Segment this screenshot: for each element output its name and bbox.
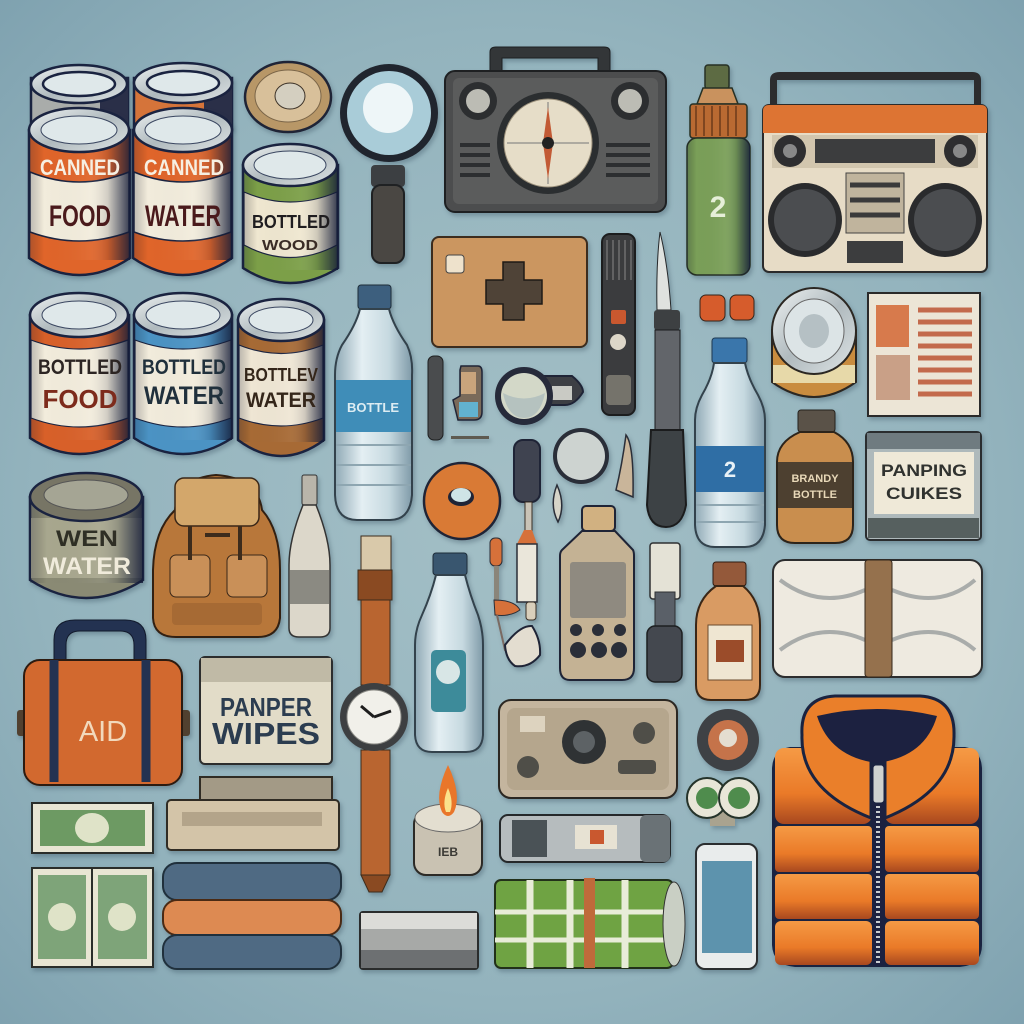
can: bottlev water: BOTTLEV bbox=[244, 365, 318, 385]
water bottle large: BOTTLE bbox=[347, 400, 399, 415]
compass radio case bbox=[445, 47, 666, 212]
shard bbox=[616, 435, 633, 497]
can: bottled food bbox=[30, 293, 129, 454]
camera bbox=[499, 700, 677, 798]
can: wen water: WATER bbox=[43, 553, 131, 580]
lid disc bbox=[245, 62, 331, 132]
amber jar bbox=[777, 410, 853, 543]
magnifying glass bbox=[340, 64, 438, 263]
box: panping cuikes: CUIKES bbox=[886, 484, 962, 503]
water bottle tall bbox=[415, 553, 483, 752]
first aid pad bbox=[432, 237, 587, 347]
wipes pack: WIPES bbox=[212, 716, 320, 751]
bag: aid bbox=[17, 620, 190, 785]
small clip tool bbox=[453, 366, 482, 420]
small amber bottle bbox=[696, 562, 760, 700]
orange capsules bbox=[700, 295, 754, 321]
vest zip pull bbox=[873, 765, 884, 803]
can: bottled wood: BOTTLED bbox=[252, 212, 330, 232]
can: canned food: CANNED bbox=[40, 155, 120, 180]
water bottle right: 2 bbox=[724, 457, 736, 482]
vest quilted rows bbox=[775, 826, 979, 965]
puffer vest bbox=[772, 696, 982, 967]
vest shoulder panels bbox=[775, 748, 979, 824]
can: bottled wood: WOOD bbox=[262, 237, 318, 254]
orange tape disc bbox=[424, 463, 500, 539]
scissor tool bbox=[490, 538, 540, 666]
newspaper bbox=[868, 293, 980, 416]
green rolled mat bbox=[495, 878, 685, 968]
can: bottled water: BOTTLED bbox=[142, 356, 226, 379]
phone bbox=[696, 844, 757, 969]
can: canned water: CANNED bbox=[144, 155, 224, 180]
torch horizontal bbox=[500, 815, 670, 862]
banknote small bbox=[32, 803, 153, 853]
can: bottled water bbox=[134, 293, 232, 454]
open can bbox=[772, 288, 856, 397]
wipes pack: PANPER bbox=[220, 692, 312, 722]
boombox bbox=[763, 72, 987, 272]
can: canned food bbox=[29, 108, 130, 275]
can: bottlev water bbox=[238, 299, 324, 456]
vest collar opening bbox=[817, 709, 937, 763]
can: canned food: FOOD bbox=[49, 200, 111, 233]
walkie talkie bbox=[560, 506, 634, 680]
screwdriver knife bbox=[647, 232, 686, 527]
folded towels bbox=[163, 863, 341, 969]
small lens bbox=[495, 367, 583, 425]
slim bottle bbox=[289, 475, 330, 637]
badge bbox=[697, 709, 759, 771]
can: bottled food: BOTTLED bbox=[38, 356, 122, 379]
green bottle: 2 bbox=[710, 191, 726, 224]
pen bbox=[428, 356, 489, 440]
drop bbox=[553, 485, 562, 522]
can: bottlev water: WATER bbox=[246, 389, 316, 412]
banknotes pair bbox=[32, 868, 153, 967]
green bottle bbox=[687, 65, 750, 275]
wrist watch bbox=[340, 536, 408, 892]
candle bbox=[414, 765, 482, 875]
vest zipper bbox=[872, 765, 885, 965]
can: wen water bbox=[30, 473, 143, 598]
amber jar: BRANDY bbox=[791, 473, 839, 485]
bag: aid: AID bbox=[79, 716, 127, 748]
can: back right bbox=[134, 63, 232, 128]
can: bottled water: WATER bbox=[144, 382, 224, 410]
can: bottled wood bbox=[243, 144, 338, 283]
can: bottled food: FOOD bbox=[42, 384, 118, 414]
candle: IEB bbox=[438, 845, 458, 859]
folded blanket bbox=[773, 560, 982, 677]
torch upright bbox=[602, 234, 635, 415]
metal bar bbox=[360, 912, 478, 969]
small tool bbox=[514, 440, 540, 620]
can: wen water: WEN bbox=[56, 526, 118, 551]
coin bbox=[553, 428, 609, 484]
tray bbox=[167, 777, 339, 850]
box: panping cuikes: PANPING bbox=[881, 461, 967, 480]
multi tool bbox=[647, 543, 682, 682]
backpack bbox=[153, 475, 280, 637]
box: panping cuikes bbox=[866, 432, 981, 540]
vest collar bbox=[802, 696, 954, 818]
water bottle right bbox=[695, 338, 765, 547]
can: canned water bbox=[133, 108, 232, 275]
can: canned water: WATER bbox=[145, 200, 221, 233]
wipes pack bbox=[200, 657, 332, 764]
vest body silhouette bbox=[772, 747, 982, 967]
green goggles bbox=[687, 778, 759, 826]
water bottle large bbox=[335, 285, 412, 520]
can: back left bbox=[31, 65, 128, 128]
amber jar: BOTTLE bbox=[793, 489, 837, 501]
